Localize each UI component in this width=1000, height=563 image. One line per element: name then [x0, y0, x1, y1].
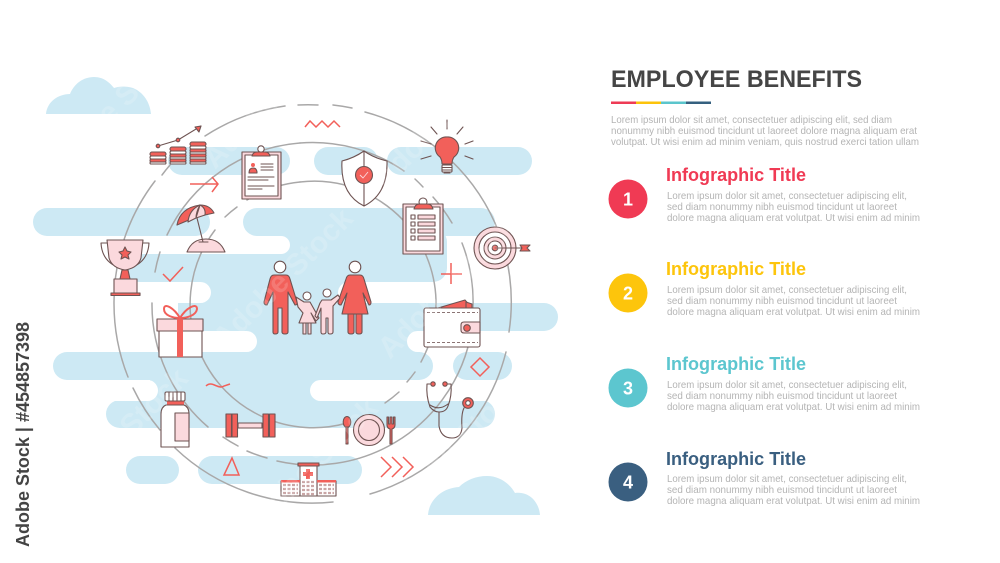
item 2: Infographic Title	[666, 259, 806, 279]
item 4: Lorem ipsum dolor sit amet, consectetuer adipiscing elit,	[667, 473, 907, 485]
icon: medicine bottle	[161, 392, 189, 447]
item 1: 1	[623, 190, 633, 210]
icon: gift	[157, 306, 203, 357]
intro paragraph: Lorem ipsum dolor sit amet, consectetuer adipiscing elit, sed diam	[611, 114, 892, 126]
side stock label: Adobe Stock | #454857398	[13, 322, 33, 547]
item 3: Lorem ipsum dolor sit amet, consectetuer adipiscing elit,	[667, 379, 907, 391]
icon: target	[474, 227, 530, 269]
icon: light bulb	[421, 120, 473, 173]
decorative accent shapes	[163, 121, 489, 477]
icon: umbrella	[177, 205, 225, 252]
item 2: sed diam nonummy nibh euismod tincidunt ut laoreet	[667, 295, 897, 307]
icon: stethoscope	[427, 382, 473, 438]
item 3: dolore magna aliquam erat volutpat. Ut wisi enim ad minim	[667, 401, 920, 413]
item 4: Infographic Title	[666, 449, 806, 469]
item 2	[608, 259, 920, 318]
item 1: dolore magna aliquam erat volutpat. Ut wisi enim ad minim	[667, 212, 920, 224]
diagonal watermark: Adobe Stock	[367, 42, 520, 195]
item 1: Infographic Title	[666, 165, 806, 185]
icon: dumbbell	[226, 414, 275, 437]
heading: employee benefits: EMPLOYEE BENEFITS	[611, 66, 862, 93]
icon: coins growth	[150, 126, 206, 164]
title underline	[611, 102, 711, 104]
item 1: sed diam nonummy nibh euismod tincidunt ut laoreet	[667, 201, 897, 213]
icon: trophy	[101, 240, 149, 296]
diagonal watermark: Adobe Stock	[197, 22, 350, 175]
item 2: Lorem ipsum dolor sit amet, consectetuer adipiscing elit,	[667, 284, 907, 296]
diagonal watermark: Adobe Stock	[372, 212, 525, 365]
diagonal watermark: Adobe Stock	[377, 372, 530, 525]
item 3: sed diam nonummy nibh euismod tincidunt ut laoreet	[667, 390, 897, 402]
icon: family	[264, 261, 371, 334]
icon: hospital	[281, 463, 336, 496]
item 1	[608, 165, 920, 224]
item 4: sed diam nonummy nibh euismod tincidunt ut laoreet	[667, 484, 897, 496]
icon: shield	[342, 151, 387, 206]
diagonal watermark: Adobe Stock	[37, 32, 190, 185]
intro paragraph: nonummy nibh euismod tincidunt ut laoreet dolore magna aliquam erat	[611, 125, 917, 137]
concentric dashed rings	[114, 105, 511, 503]
diagonal watermark: Adobe Stock	[232, 392, 385, 545]
diagonal watermark: Adobe Stock	[42, 362, 195, 515]
intro paragraph	[611, 114, 919, 148]
item 4	[608, 449, 920, 507]
diagonal watermark	[37, 22, 530, 545]
intro paragraph: volutpat. Ut wisi enim ad minim veniam, quis nostrud exerci tation ullam	[611, 136, 919, 148]
icon: wallet	[424, 300, 480, 347]
item 2: 2	[623, 284, 633, 304]
item 3	[608, 354, 920, 413]
icon: checklist clipboard	[403, 198, 443, 254]
icon: plate and cutlery	[343, 414, 395, 446]
item 3: 3	[623, 378, 633, 398]
item 3: Infographic Title	[666, 354, 806, 374]
item 4: 4	[623, 472, 633, 492]
background clouds and pills	[33, 77, 558, 515]
item 2: dolore magna aliquam erat volutpat. Ut wisi enim ad minim	[667, 306, 920, 318]
item 1: Lorem ipsum dolor sit amet, consectetuer adipiscing elit,	[667, 190, 907, 202]
icon: resume clipboard	[242, 146, 281, 199]
diagonal watermark: Adobe Stock	[207, 202, 360, 355]
item 4: dolore magna aliquam erat volutpat. Ut wisi enim ad minim	[667, 495, 920, 507]
